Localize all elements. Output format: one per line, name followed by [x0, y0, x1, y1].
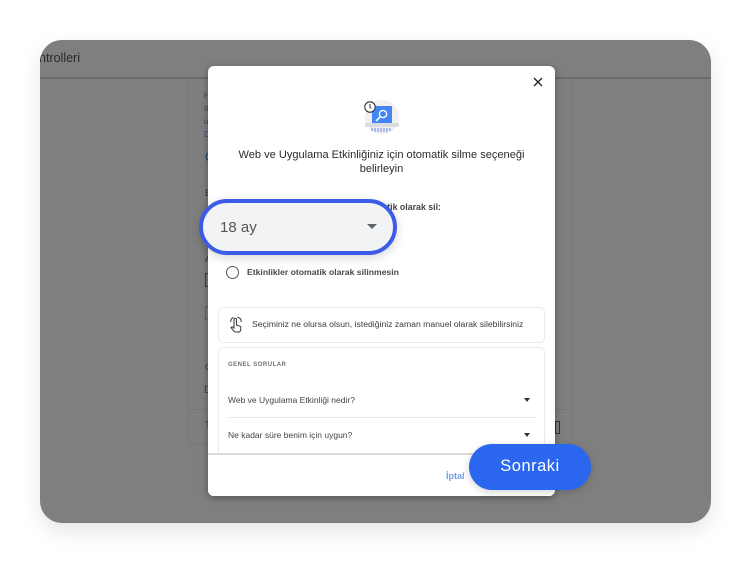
background icon fragment: [555, 421, 560, 434]
dialog heading: Web ve Uygulama Etkinliğiniz için otomatik silme seçeneği: [239, 149, 524, 161]
next button: Sonraki: [500, 457, 560, 475]
FAQ arrow 2: [524, 433, 530, 437]
background panel footer rule: [188, 409, 573, 410]
header title fragment: ntrolleri: [40, 51, 80, 65]
background link fragment lower: D: [204, 384, 212, 396]
FAQ item 2: Ne kadar süre benim için uygun?: [228, 430, 352, 440]
dialog heading: [238, 149, 524, 175]
manual delete info box: [218, 307, 545, 343]
radio option: [226, 266, 399, 279]
header divider: [40, 77, 711, 79]
info text: Seçiminiz ne olursa olsun, istediğiniz zaman manuel olarak silebilirsiniz: [252, 319, 523, 329]
FAQ box: [218, 347, 545, 467]
cancel link: İptal: [446, 471, 465, 481]
background letter C: C: [205, 362, 212, 372]
background link fragment footer: T: [205, 420, 211, 431]
FAQ heading: GENEL SORULAR: [228, 362, 286, 368]
close icon: [534, 78, 542, 86]
background text fragments: ö: [204, 104, 208, 113]
dialog heading: belirleyin: [360, 163, 403, 175]
icon: hand: [230, 317, 242, 332]
background checkbox fragment lower: [205, 306, 211, 320]
next button: [469, 444, 591, 490]
FAQ divider: [228, 417, 536, 418]
background text fragments: u: [204, 117, 208, 126]
FAQ arrow 1: [524, 398, 530, 402]
dialog footer: [208, 453, 555, 496]
radio circle: [226, 266, 239, 279]
background link fragment: C: [205, 150, 214, 164]
auto-delete label: Şu süreden eski etkinlikleri otomatik olarak sil:: [245, 202, 441, 212]
background letter A: A: [205, 254, 211, 264]
background text fragments: D: [204, 130, 210, 139]
background checkbox fragment: [205, 273, 211, 287]
background app screen: [40, 40, 711, 523]
background text fragments: [204, 91, 210, 139]
shredder search icon: [364, 100, 399, 134]
dropdown arrow: [367, 224, 377, 229]
background letter E: E: [205, 188, 211, 198]
dropdown value: 18 ay: [220, 218, 257, 236]
modal dialog: [208, 66, 555, 496]
highlighted duration dropdown: [199, 199, 397, 255]
background content panel: [188, 78, 573, 445]
FAQ item 1: Web ve Uygulama Etkinliği nedir?: [228, 395, 355, 405]
radio label: Etkinlikler otomatik olarak silinmesin: [247, 267, 399, 277]
background text fragments: H: [204, 91, 210, 100]
